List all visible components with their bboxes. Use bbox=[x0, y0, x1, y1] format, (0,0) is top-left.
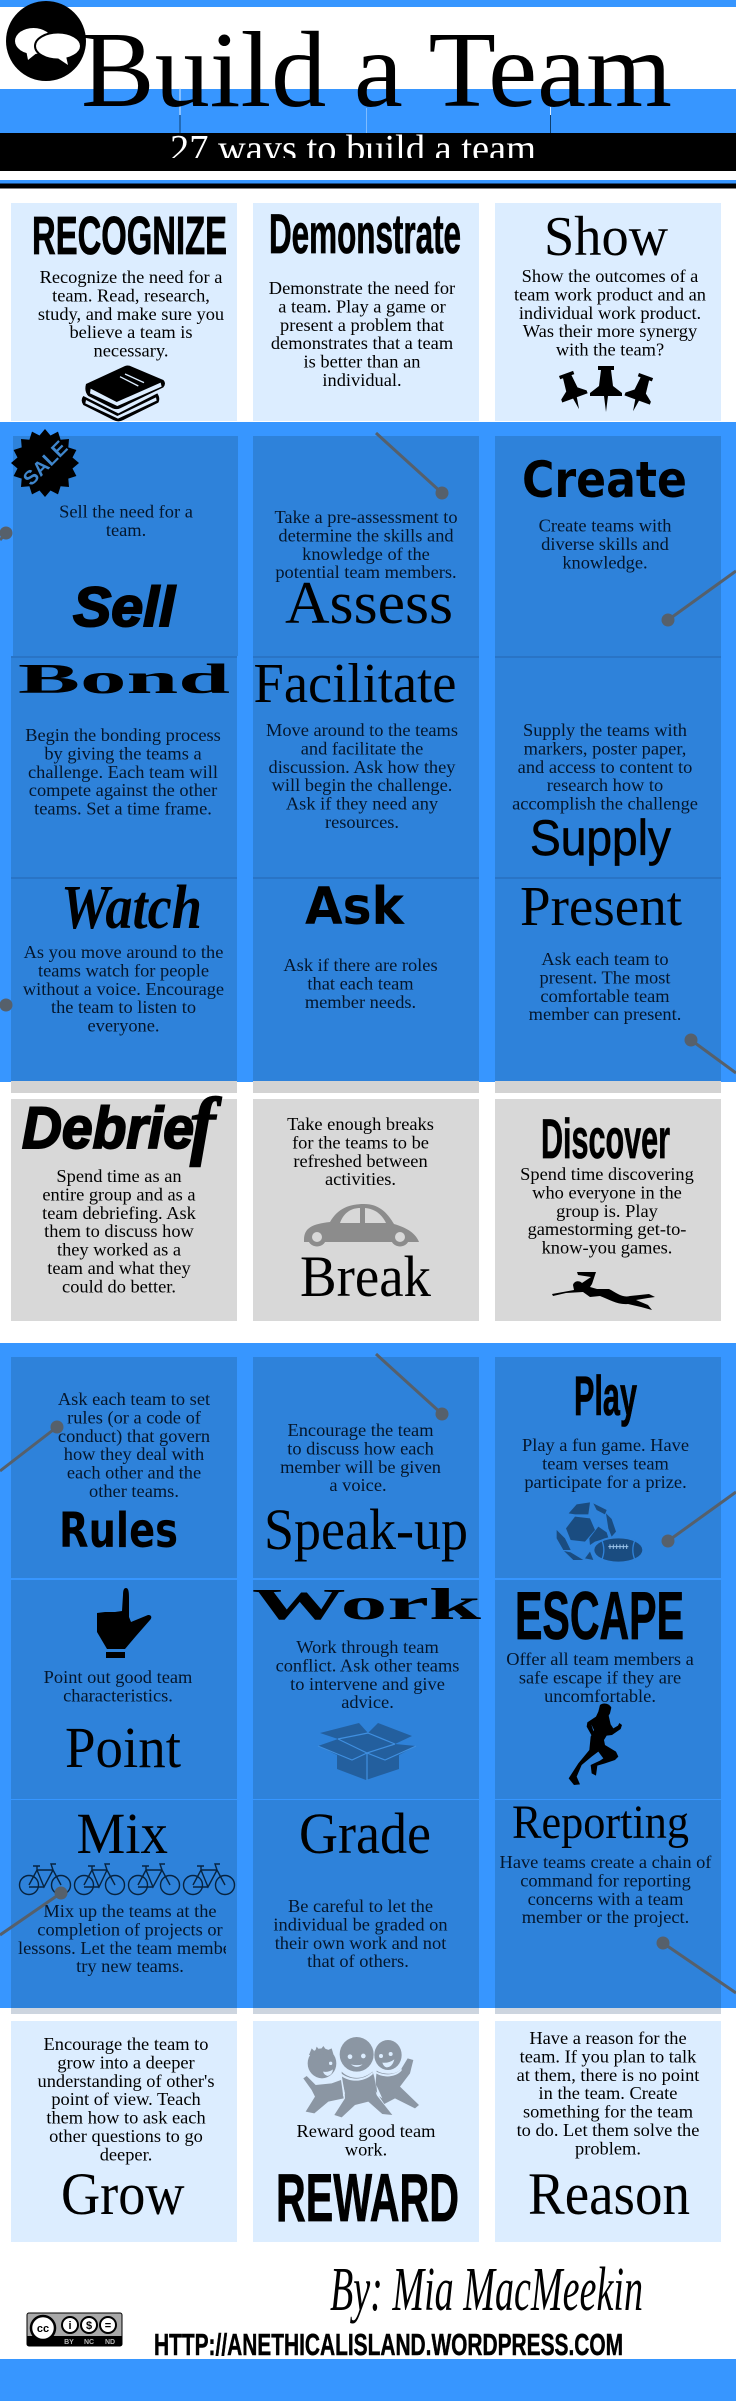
text: reason: Have a reason for the bbox=[529, 2028, 687, 2048]
text: discover: gamestorming get-to- bbox=[528, 1219, 686, 1239]
panel: speak-up bbox=[253, 1357, 479, 1578]
text: play: Play a fun game. Have bbox=[522, 1435, 689, 1455]
badge: creative commons: = bbox=[105, 2320, 111, 2332]
text: debrief: them to discuss how bbox=[44, 1221, 195, 1241]
text: escape: Offer all team members a bbox=[506, 1649, 694, 1669]
heading: reporting: Reporting bbox=[512, 1796, 689, 1849]
text: facilitate: Ask if they need any bbox=[286, 794, 439, 814]
heading: reward: REWARD bbox=[276, 2160, 459, 2236]
text: reason: at them, there is no point bbox=[517, 2065, 699, 2085]
text: rules: rules (or a code of bbox=[67, 1407, 202, 1428]
text: assess: knowledge of the bbox=[302, 544, 430, 564]
heading: work: Work bbox=[252, 1580, 482, 1629]
icon: bicycles bbox=[20, 1864, 234, 1894]
panel: mix bbox=[11, 1800, 244, 2008]
text: facilitate: will begin the challenge. bbox=[272, 775, 452, 795]
text: work: to intervene and give bbox=[290, 1674, 445, 1694]
text: recognize: study, and make sure you bbox=[38, 304, 224, 324]
text: watch: As you move around to the bbox=[24, 942, 223, 962]
panel: show bbox=[495, 203, 721, 421]
text: grade: that of others. bbox=[307, 1951, 409, 1971]
text: break: refreshed between bbox=[293, 1151, 428, 1171]
text: reason: team. If you plan to talk bbox=[520, 2046, 697, 2066]
text: show: Show the outcomes of a bbox=[522, 266, 698, 286]
text: reason: something for the team bbox=[523, 2102, 694, 2122]
text: grade: Be careful to let the bbox=[288, 1896, 433, 1916]
text: reason: problem. bbox=[575, 2138, 641, 2158]
text: grow: understanding of other's bbox=[38, 2071, 214, 2091]
text: debrief: could do better. bbox=[62, 1276, 176, 1296]
icon: diving figure bbox=[552, 1272, 655, 1310]
badge: creative commons bbox=[27, 2313, 122, 2346]
text: point: Point out good team bbox=[44, 1667, 193, 1687]
text: sell: team. bbox=[106, 520, 146, 540]
text: facilitate: discussion. Ask how they bbox=[269, 757, 456, 777]
heading: sell: Sell bbox=[73, 575, 176, 638]
panel: ask bbox=[253, 877, 479, 1081]
pins: section one bbox=[0, 433, 736, 1073]
text: demonstrate: a team. Play a game or bbox=[278, 296, 446, 316]
panel: work bbox=[253, 1580, 479, 1799]
text: debrief: entire group and as a bbox=[42, 1184, 196, 1204]
heading: point: Point bbox=[65, 1715, 181, 1780]
text: mix: try new teams. bbox=[76, 1956, 184, 1976]
text: supply: Supply the teams with bbox=[523, 720, 687, 740]
text: demonstrate: present a problem that bbox=[280, 315, 444, 335]
icon: speech bubbles bbox=[6, 1, 86, 81]
blue section two bbox=[0, 1343, 736, 2008]
text: discover: know-you games. bbox=[542, 1238, 672, 1258]
text: rules: how they deal with bbox=[64, 1444, 204, 1464]
badge: creative commons: BY bbox=[64, 2339, 74, 2346]
text: reward: work. bbox=[345, 2139, 387, 2159]
blue section one bbox=[0, 422, 736, 1082]
heading: speak-up: Speak-up bbox=[264, 1497, 468, 1562]
text: show: individual work product. bbox=[519, 303, 701, 323]
footer band bbox=[0, 2359, 736, 2401]
heading: supply: Supply bbox=[530, 810, 671, 866]
icon: books bbox=[82, 365, 165, 421]
title: Build a Team bbox=[81, 10, 672, 130]
text: escape: safe escape if they are bbox=[519, 1667, 681, 1687]
text: watch: without a voice. Encourage bbox=[23, 979, 224, 999]
heading: debrief: Debrie bbox=[22, 1096, 194, 1161]
heading: reason: Reason bbox=[528, 2161, 690, 2227]
text: assess: Take a pre-assessment to bbox=[274, 507, 458, 527]
text: ask: member needs. bbox=[305, 992, 416, 1012]
panel: reward bbox=[253, 2021, 479, 2242]
text: discover: group is. Play bbox=[556, 1201, 659, 1221]
text: demonstrate: demonstrates that a team bbox=[271, 333, 454, 353]
text: facilitate: and facilitate the bbox=[301, 738, 423, 758]
text: play: team verses team bbox=[542, 1453, 670, 1473]
text: work: advice. bbox=[341, 1692, 394, 1712]
text: show: Was their more synergy bbox=[523, 321, 698, 341]
text: recognize: necessary. bbox=[94, 341, 168, 361]
text: escape: uncomfortable. bbox=[544, 1686, 656, 1706]
text: supply: and access to content to bbox=[518, 757, 692, 777]
text: rules: other teams. bbox=[89, 1481, 179, 1501]
panel: reason bbox=[495, 2021, 721, 2242]
heading: demonstrate: Demonstrate bbox=[269, 202, 461, 265]
badge: creative commons: NC bbox=[84, 2339, 94, 2346]
panel: create bbox=[495, 436, 721, 656]
text: debrief: Spend time as an bbox=[56, 1166, 182, 1186]
heading: bond: Bond bbox=[18, 657, 230, 703]
text: grow: grow into a deeper bbox=[57, 2052, 195, 2072]
text: grow: deeper. bbox=[100, 2144, 152, 2164]
panel: grade bbox=[253, 1800, 479, 2008]
text: present: comfortable team bbox=[540, 986, 670, 1006]
text: present: present. The most bbox=[540, 967, 670, 987]
text: rules: Ask each team to set bbox=[58, 1389, 210, 1409]
header band bbox=[0, 0, 736, 188]
icon: runner bbox=[569, 1704, 622, 1785]
heading: present: Present bbox=[520, 876, 682, 938]
text: demonstrate: Demonstrate the need for bbox=[269, 278, 455, 298]
heading: ask: Ask bbox=[305, 877, 405, 937]
panel: demonstrate bbox=[253, 202, 479, 421]
text: break: for the teams to be bbox=[292, 1132, 429, 1152]
panel: discover bbox=[495, 1099, 721, 1321]
text: play: participate for a prize. bbox=[524, 1472, 687, 1492]
text: watch: the team to listen to bbox=[51, 997, 196, 1017]
text: assess: determine the skills and bbox=[278, 525, 454, 545]
text: assess: potential team members. bbox=[275, 562, 457, 582]
panel: reporting bbox=[495, 1796, 721, 2008]
text: grade: their own work and not bbox=[275, 1933, 446, 1953]
heading: rules: Rules bbox=[59, 1503, 178, 1559]
panel: supply bbox=[495, 657, 721, 877]
text: speak-up: to discuss how each bbox=[287, 1438, 434, 1458]
text: demonstrate: is better than an bbox=[304, 352, 420, 372]
panel: recognize bbox=[11, 203, 237, 421]
panel: point bbox=[11, 1580, 237, 1799]
text: debrief: team debriefing. Ask bbox=[42, 1203, 197, 1223]
text: bond: compete against the other bbox=[29, 780, 217, 800]
text: present: member can present. bbox=[529, 1004, 681, 1024]
text: create: Create teams with bbox=[539, 516, 671, 536]
text: break: Take enough breaks bbox=[287, 1114, 434, 1134]
badge: creative commons: cc bbox=[37, 2323, 49, 2335]
text: supply: markers, poster paper, bbox=[524, 738, 686, 758]
text: grow: other questions to go bbox=[49, 2126, 203, 2146]
panel: assess bbox=[253, 436, 479, 656]
text: debrief: team and what they bbox=[47, 1258, 192, 1278]
text: create: diverse skills and bbox=[541, 534, 669, 554]
text: mix bbox=[18, 1904, 226, 1976]
text: debrief: they worked as a bbox=[57, 1240, 181, 1260]
text: reason: in the team. Create bbox=[539, 2083, 677, 2103]
icon: open box bbox=[318, 1723, 416, 1780]
text: discover: who everyone in the bbox=[532, 1182, 682, 1202]
text: recognize: team. Read, research, bbox=[52, 285, 210, 305]
heading: create: Create bbox=[522, 451, 687, 509]
text: speak-up: Encourage the team bbox=[287, 1420, 434, 1440]
icon: sale badge: SALE bbox=[19, 437, 72, 490]
text: ask: Ask if there are roles bbox=[283, 955, 438, 975]
gray strips under section two bbox=[11, 2008, 721, 2014]
text: grade: individual be graded on bbox=[273, 1914, 448, 1934]
text: reporting: member or the project. bbox=[522, 1907, 689, 1927]
gray strips under section one bbox=[11, 1081, 721, 1093]
text: supply: research how to bbox=[547, 775, 663, 795]
heading: recognize: RECOGNIZE bbox=[32, 206, 227, 266]
text: present: Ask each team to bbox=[541, 949, 669, 969]
text: show: with the team? bbox=[556, 340, 664, 360]
panel: escape bbox=[495, 1578, 721, 1799]
text: discover: Spend time discovering bbox=[520, 1164, 694, 1184]
text: show: team work product and an bbox=[514, 284, 706, 304]
text: break: activities. bbox=[325, 1169, 396, 1189]
text: demonstrate: individual. bbox=[322, 370, 402, 390]
text: reporting: Have teams create a chain of bbox=[500, 1852, 712, 1872]
text: mix: lessons. Let the team members bbox=[18, 1938, 244, 1958]
heading: mix: Mix bbox=[76, 1801, 168, 1866]
text: grow: point of view. Teach bbox=[51, 2089, 201, 2109]
text: reporting: command for reporting bbox=[520, 1870, 691, 1890]
heading: watch: Watch bbox=[61, 874, 202, 942]
text: facilitate: resources. bbox=[325, 812, 399, 832]
text: bond: by giving the teams a bbox=[44, 743, 202, 763]
panel: watch bbox=[11, 874, 237, 1081]
text: bond: Begin the bonding process bbox=[25, 725, 221, 745]
panel: debrief bbox=[11, 1083, 237, 1321]
text: supply: accomplish the challenge bbox=[512, 794, 698, 814]
text: work: conflict. Ask other teams bbox=[276, 1655, 459, 1675]
heading: debrief: f bbox=[190, 1083, 222, 1167]
panel: rules bbox=[11, 1357, 237, 1578]
heading: debrief bbox=[22, 1083, 222, 1167]
icon: sale badge bbox=[11, 429, 79, 497]
text: watch: everyone. bbox=[88, 1016, 160, 1036]
panel: play bbox=[495, 1357, 721, 1578]
text: reward: Reward good team bbox=[297, 2121, 436, 2141]
heading: break: Break bbox=[300, 1244, 431, 1309]
text: speak-up: a voice. bbox=[329, 1475, 387, 1495]
heading: grow: Grow bbox=[61, 2161, 185, 2227]
text: sell: Sell the need for a bbox=[59, 502, 193, 522]
text: grow: them how to ask each bbox=[46, 2108, 206, 2128]
icon: pointing hand bbox=[97, 1588, 151, 1658]
text: rules: conduct) that govern bbox=[58, 1426, 210, 1447]
panel: bond bbox=[11, 657, 237, 877]
text: mix: Mix up the teams at the bbox=[43, 1901, 217, 1921]
text: watch: teams watch for people bbox=[38, 960, 209, 980]
text: reporting: concerns with a team bbox=[528, 1889, 684, 1909]
badge: creative commons: i bbox=[68, 2320, 72, 2332]
panel: facilitate bbox=[253, 653, 479, 877]
text: speak-up: member will be given bbox=[280, 1457, 441, 1477]
text: facilitate: Move around to the teams bbox=[266, 720, 458, 740]
text: point: characteristics. bbox=[63, 1685, 173, 1705]
text: work: Work through team bbox=[296, 1637, 439, 1657]
panel: sell bbox=[11, 429, 238, 656]
text: recognize: Recognize the need for a bbox=[40, 267, 222, 287]
icon: push pins bbox=[553, 366, 659, 416]
panel: present bbox=[495, 876, 721, 1081]
text: recognize: believe a team is bbox=[69, 322, 193, 342]
heading: grade: Grade bbox=[299, 1801, 431, 1866]
text: ask: that each team bbox=[307, 973, 414, 993]
panel: grow bbox=[11, 2021, 237, 2242]
text: create: knowledge. bbox=[562, 552, 648, 572]
text: bond: challenge. Each team will bbox=[28, 762, 218, 782]
text: mix: completion of projects or bbox=[37, 1919, 223, 1939]
text: reason: to do. Let them solve the bbox=[517, 2120, 699, 2140]
text: bond: teams. Set a time frame. bbox=[34, 799, 212, 819]
panel: break bbox=[253, 1099, 479, 1321]
badge: creative commons: $ bbox=[86, 2320, 92, 2332]
heading: show: Show bbox=[544, 206, 669, 268]
heading: play: Play bbox=[574, 1364, 637, 1427]
badge: creative commons: ND bbox=[105, 2339, 115, 2346]
text: rules: each other and the bbox=[67, 1463, 201, 1483]
heading: assess: Assess bbox=[285, 570, 453, 636]
icon: sports balls bbox=[557, 1502, 643, 1563]
text: grow: Encourage the team to bbox=[44, 2034, 208, 2054]
icon: car bbox=[304, 1204, 419, 1246]
pins: section two bbox=[0, 1354, 736, 1993]
heading: facilitate: Facilitate bbox=[254, 653, 456, 715]
subtitle: 27 ways to build a team bbox=[170, 128, 536, 170]
icon: happy people bbox=[303, 2037, 419, 2117]
